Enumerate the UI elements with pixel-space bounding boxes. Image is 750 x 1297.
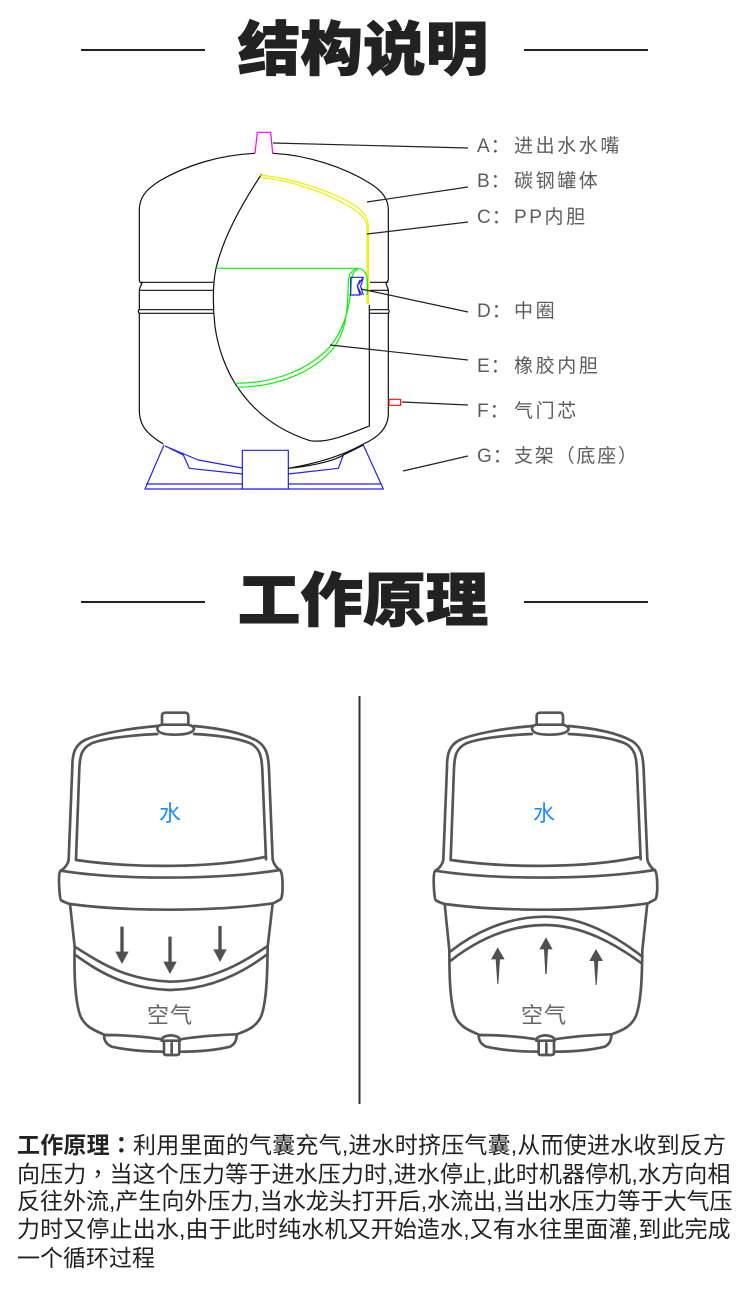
text: G： xyxy=(477,446,513,467)
leader lines xyxy=(273,143,468,471)
body text xyxy=(17,1126,733,1271)
left tank xyxy=(59,713,283,1055)
right tank xyxy=(434,713,657,1055)
text: 气门芯 xyxy=(514,401,579,422)
right arrows xyxy=(491,937,603,985)
label: water left: 水 xyxy=(159,801,181,826)
label: air left: 空气 xyxy=(147,1003,193,1028)
labels: 进出水水嘴 xyxy=(514,136,622,157)
text: C： xyxy=(477,207,512,228)
left arrows xyxy=(115,926,227,974)
text: PP内胆 xyxy=(514,207,588,228)
text: F： xyxy=(477,401,510,422)
text: B： xyxy=(477,171,511,192)
body text: 一个循环过程 xyxy=(17,1245,155,1271)
text: 碳钢罐体 xyxy=(514,171,600,192)
body text: 反往外流,产生向外压力,当水龙头打开后,水流出,当出水压力等于大气压 xyxy=(17,1188,733,1214)
heading: working principle: 工作原理 xyxy=(238,569,488,634)
label: air right: 空气 xyxy=(521,1003,567,1028)
text: D： xyxy=(477,301,512,322)
body text: 力时又停止出水,由于此时纯水机又开始造水,又有水往里面灌,到此完成 xyxy=(17,1216,731,1242)
body text: 工作原理：利用里面的气囊充气,进水时挤压气囊,从而使进水收到反方 xyxy=(17,1126,726,1160)
heading: structure: 结构说明 xyxy=(238,18,488,83)
text: E： xyxy=(477,356,511,377)
divider xyxy=(358,696,360,1104)
label: water right: 水 xyxy=(533,801,555,826)
labels: A： xyxy=(477,136,511,157)
text: 支架（底座） xyxy=(514,446,639,467)
text: 橡胶内胆 xyxy=(514,356,600,377)
diagram: tank structure xyxy=(138,132,468,490)
body text: 向压力，当这个压力等于进水压力时,进水停止,此时机器停机,水方向相 xyxy=(17,1155,730,1189)
text: 中圈 xyxy=(514,301,557,322)
